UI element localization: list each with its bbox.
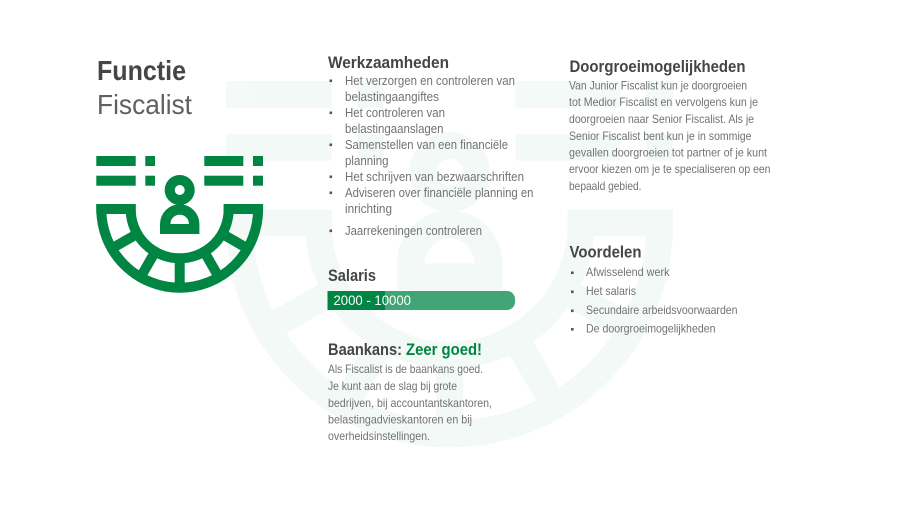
bar: salary range: 2000 - 10000	[334, 293, 411, 308]
heading: doorgroeimogelijkheden: Doorgroeimogelijkheden	[570, 57, 746, 76]
text block: doorgroeimogelijkheden: gevallen doorgroeien tot partner of je kunt	[569, 146, 768, 160]
list: voordelen	[571, 265, 738, 336]
title: Fiscalist	[97, 89, 192, 120]
text block: baankans	[328, 362, 492, 443]
panel: baankans	[328, 340, 492, 443]
text block: baankans: Je kunt aan de slag bij grote	[328, 379, 457, 393]
icon: large watermark	[226, 81, 673, 434]
list: voordelen: De doorgroeimogelijkheden	[586, 322, 716, 336]
list: voordelen: Secundaire arbeidsvoorwaarden	[586, 303, 738, 317]
text block: doorgroeimogelijkheden: tot Medior Fiscalist en vervolgens kun je	[569, 95, 758, 109]
text block: baankans: overheidsinstellingen.	[328, 429, 430, 443]
list: werkzaamheden: Het controleren van	[345, 105, 445, 120]
text block: doorgroeimogelijkheden	[569, 78, 770, 193]
list: werkzaamheden: Het verzorgen en controleren van	[345, 73, 515, 88]
text block: doorgroeimogelijkheden: Van Junior Fiscalist kun je doorgroeien	[569, 78, 747, 92]
list: werkzaamheden: belastingaangiftes	[345, 89, 439, 104]
text block: baankans: belastingadvieskantoren en bij	[328, 412, 472, 426]
list: werkzaamheden: belastingaanslagen	[345, 121, 444, 136]
text block: baankans: bedrijven, bij accountantskantoren,	[328, 396, 492, 410]
heading: salaris: Salaris	[328, 266, 376, 285]
list: werkzaamheden	[330, 73, 534, 238]
panel: salaris	[328, 266, 515, 310]
bar: salary range	[328, 291, 515, 310]
list: voordelen: Het salaris	[586, 284, 636, 298]
heading: baankans: Baankans:	[328, 340, 402, 359]
list: werkzaamheden: Jaarrekeningen controleren	[345, 223, 482, 238]
heading: werkzaamheden: Werkzaamheden	[328, 53, 449, 72]
panel: doorgroeimogelijkheden	[569, 57, 770, 193]
text block: doorgroeimogelijkheden: Senior Fiscalist bent kun je in sommige	[569, 129, 752, 143]
title: Functie	[97, 55, 186, 86]
text block: doorgroeimogelijkheden: ervoor kiezen om je te specialiseren op een	[569, 162, 770, 176]
list: werkzaamheden: Het schrijven van bezwaarschriften	[345, 169, 524, 184]
list: werkzaamheden: Samenstellen van een financiële	[345, 137, 508, 152]
text block: baankans: Als Fiscalist is de baankans goed.	[328, 362, 483, 376]
list: werkzaamheden: Adviseren over financiële planning en	[345, 185, 534, 200]
rating: zeer goed: Zeer goed!	[406, 340, 482, 359]
heading: voordelen: Voordelen	[570, 242, 642, 262]
text block: doorgroeimogelijkheden: doorgroeien naar Senior Fiscalist. Als je	[569, 112, 754, 126]
icon: fiscalist	[96, 156, 263, 288]
list: voordelen: Afwisselend werk	[586, 265, 670, 279]
panel: werkzaamheden	[328, 53, 534, 238]
list: werkzaamheden: inrichting	[345, 201, 392, 216]
list: werkzaamheden: planning	[345, 153, 388, 168]
text block: doorgroeimogelijkheden: bepaald gebied.	[569, 179, 642, 193]
title	[97, 55, 192, 120]
panel: voordelen	[570, 242, 738, 336]
